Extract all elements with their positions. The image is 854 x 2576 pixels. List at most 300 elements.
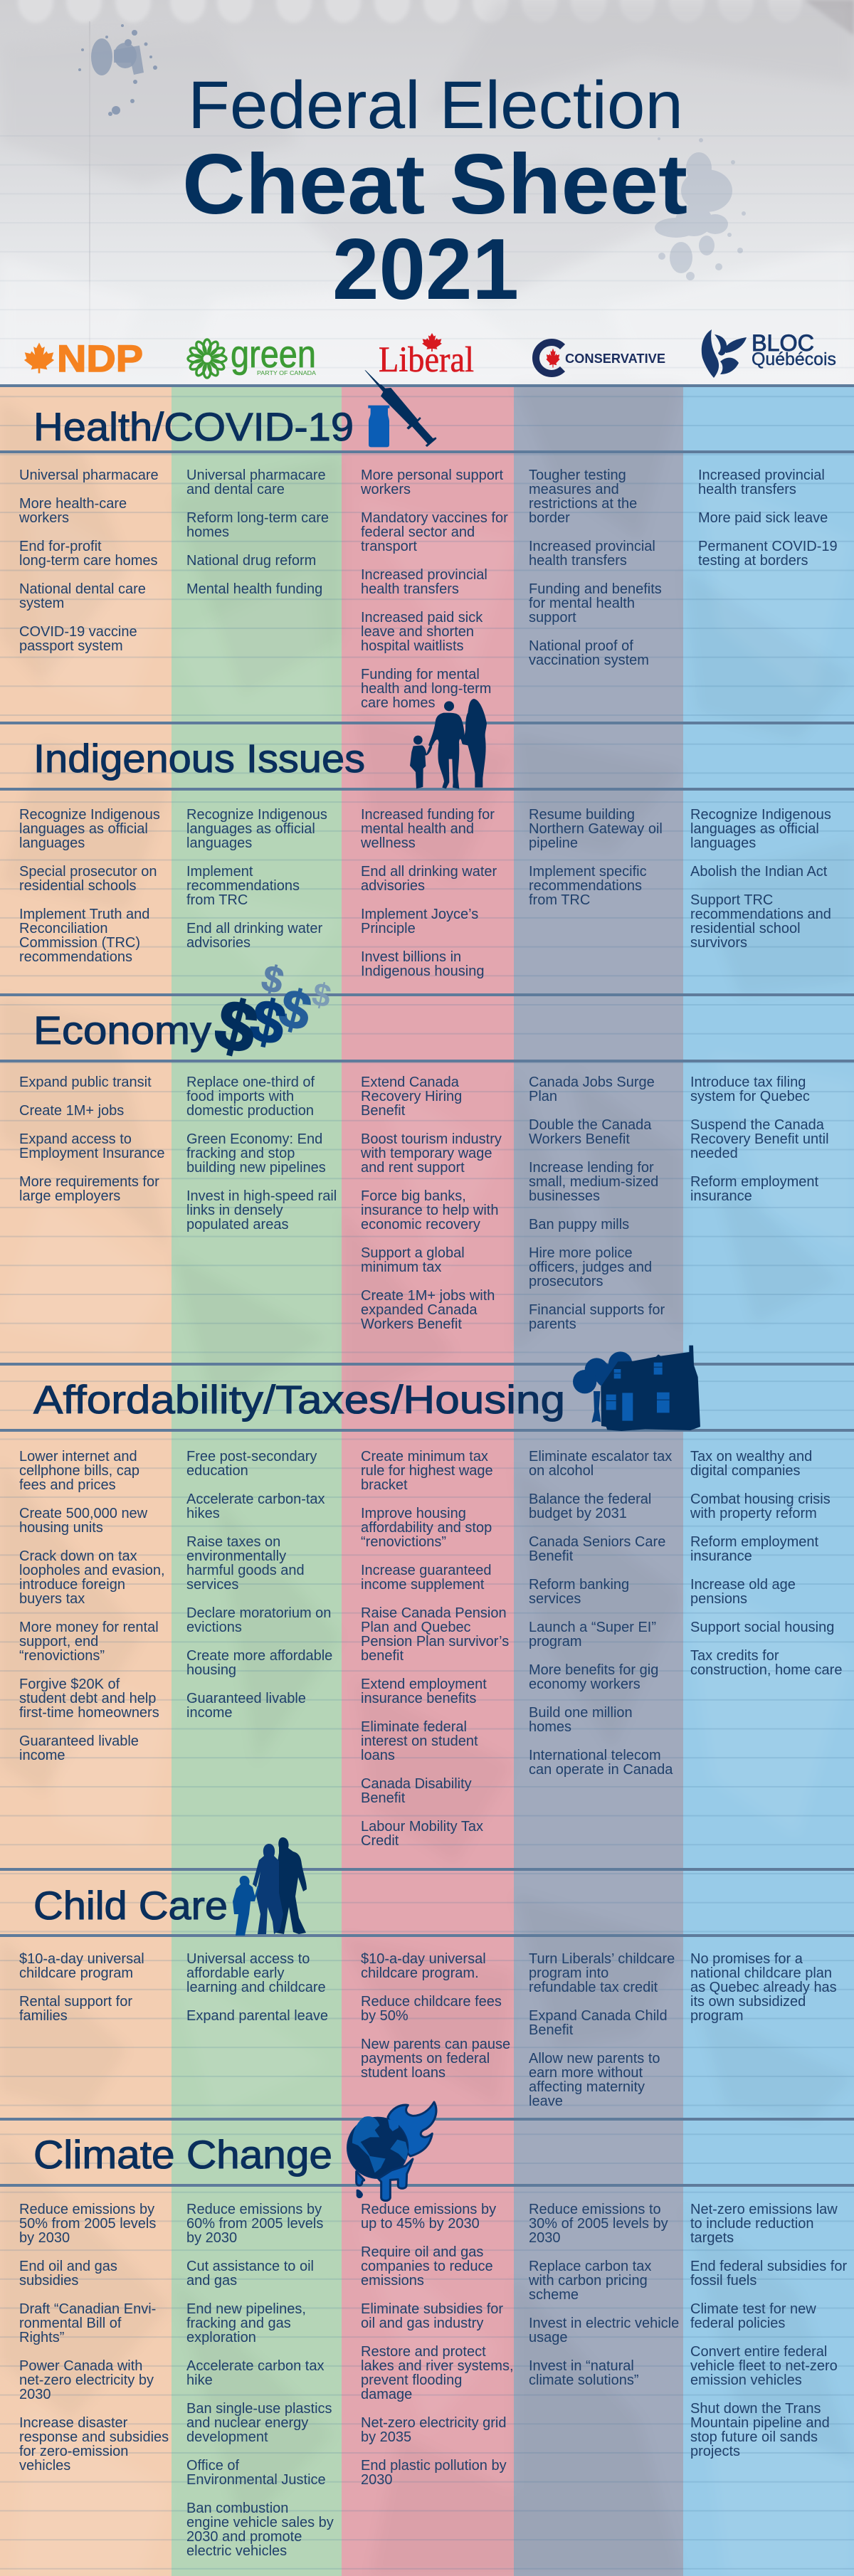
column: Liberal economy policies (361, 1075, 502, 1332)
column: Bloc Indigenous policies: Support TRC (690, 892, 773, 908)
column: Bloc health policies: More paid sick leave (698, 510, 828, 526)
column: NDP health policies: system (19, 596, 64, 611)
column: NDP health policies: long-term care homes (19, 553, 158, 569)
column: Conservative climate policies: with carbon pricing (529, 2273, 648, 2289)
column: NDP climate policies: Draft “Canadian Envi- (19, 2301, 156, 2317)
column: Bloc child care policies (690, 1952, 854, 2037)
column: NDP economy policies: large employers (19, 1188, 120, 1204)
column: Liberal affordability policies: Create minimum tax (361, 1449, 488, 1464)
column: NDP climate policies: Increase disaster (19, 2415, 127, 2431)
column: Liberal climate policies: prevent flooding (361, 2372, 462, 2388)
column: Liberal economy policies: expanded Canada (361, 1302, 477, 1318)
heading: Affordability/Taxes/Housing: Affordability/Taxes/Housing (33, 1377, 565, 1422)
column: Conservative climate policies: climate solutions” (529, 2372, 639, 2388)
logo: Conservative: CONSERVATIVE (565, 352, 665, 366)
column: Green economy policies: Green Economy: End (186, 1131, 322, 1147)
column: NDP affordability policies: fees and prices (19, 1477, 116, 1493)
icon: dollar signs: $ (258, 957, 288, 1003)
party logos row (24, 329, 836, 380)
column: Liberal climate policies: Eliminate subsidies for (361, 2301, 503, 2317)
column: Conservative child care policies (529, 1952, 697, 2123)
column: Liberal economy policies: Benefit (361, 1103, 405, 1119)
column: Liberal affordability policies: insurance benefits (361, 1691, 476, 1706)
column: Conservative economy policies: officers, judges and (529, 1260, 652, 1275)
column: NDP affordability policies: student debt and help (19, 1691, 156, 1706)
column: Bloc affordability policies: digital companies (690, 1463, 801, 1479)
column: Green climate policies: 60% from 2005 levels (186, 2216, 323, 2232)
column: NDP affordability policies: Guaranteed livable (19, 1733, 139, 1749)
column: Liberal economy policies: Create 1M+ jobs with (361, 1288, 495, 1304)
column: NDP Indigenous policies: recommendations (19, 949, 132, 965)
column: Bloc climate policies: fossil fuels (690, 2273, 757, 2289)
column: Conservative affordability policies: Canada Seniors Care (529, 1534, 665, 1550)
column: NDP child care policies: childcare program (19, 1965, 133, 1981)
column: Green health policies: Reform long-term care (186, 510, 329, 526)
column: NDP affordability policies: first-time homeowners (19, 1705, 159, 1721)
column: Liberal affordability policies: bracket (361, 1477, 408, 1493)
column: Green Indigenous policies: languages as official (186, 821, 315, 837)
column: NDP Indigenous policies: languages as official (19, 821, 148, 837)
column: Conservative affordability policies: program (529, 1634, 581, 1649)
column: Liberal health policies: workers (361, 482, 411, 497)
column: Bloc affordability policies (690, 1449, 842, 1678)
column: Liberal child care policies: Reduce childcare fees (361, 1994, 502, 2010)
column: Green affordability policies: environmentally (186, 1548, 286, 1564)
column: Conservative child care policies: leave (529, 2094, 563, 2109)
column: NDP climate policies: End oil and gas (19, 2259, 117, 2274)
column: Bloc economy policies: Recovery Benefit until (690, 1131, 829, 1147)
column: Green economy policies: domestic production (186, 1103, 314, 1119)
column: Conservative Indigenous policies: Implement specific (529, 864, 647, 880)
column: Conservative economy policies: Canada Jobs Surge (529, 1075, 655, 1090)
column: NDP economy policies: Expand access to (19, 1131, 132, 1147)
column: Green Indigenous policies: languages (186, 835, 252, 851)
column: Liberal child care policies: by 50% (361, 2008, 408, 2024)
column: Green health policies: Universal pharmacare (186, 468, 326, 483)
column: NDP child care policies: $10-a-day universal (19, 1951, 144, 1967)
column: Green affordability policies: income (186, 1705, 232, 1721)
column: NDP affordability policies (19, 1449, 165, 1763)
column: NDP affordability policies: “renovictions” (19, 1648, 105, 1664)
column: Liberal affordability policies: Pension Plan survivor’s (361, 1634, 509, 1649)
column: Green climate policies: and gas (186, 2273, 237, 2289)
column: Bloc Indigenous policies: survivors (690, 935, 747, 951)
column: NDP climate policies: by 2030 (19, 2230, 70, 2246)
column: Liberal affordability policies: Canada Disability (361, 1776, 472, 1792)
column: NDP health policies: Universal pharmacare (19, 468, 159, 483)
icon: dollar signs (199, 954, 356, 1067)
column: Green health policies: Mental health funding (186, 581, 322, 597)
column: NDP climate policies: vehicles (19, 2458, 70, 2474)
panel: Child Care (0, 1868, 854, 2109)
column: NDP affordability policies: support, end (19, 1634, 98, 1649)
column: NDP health policies: National dental care (19, 581, 146, 597)
column: Bloc climate policies: emission vehicles (690, 2372, 802, 2388)
column: Liberal health policies: federal sector and (361, 524, 475, 540)
column: Liberal health policies (361, 468, 508, 711)
logo: Green Party of Canada (188, 333, 316, 378)
column: NDP economy policies: Employment Insurance (19, 1146, 165, 1161)
column: Green climate policies: Accelerate carbon tax (186, 2358, 324, 2374)
column: Bloc climate policies: Convert entire federal (690, 2344, 827, 2360)
title line: Cheat Sheet: Cheat Sheet (182, 137, 687, 232)
column: Green Indigenous policies: from TRC (186, 892, 248, 908)
column: Liberal economy policies: insurance to help with (361, 1203, 498, 1218)
column: Bloc Indigenous policies: Abolish the Indian Act (690, 864, 827, 880)
column: Liberal health policies: hospital waitlists (361, 638, 464, 654)
heading: Climate Change: Climate Change (33, 2132, 332, 2177)
logo: NDP (24, 338, 143, 380)
column: Conservative climate policies: Reduce emissions to (529, 2202, 661, 2217)
column: Liberal health policies: Increased paid sick (361, 610, 483, 625)
column: Bloc child care policies: national childcare plan (690, 1965, 832, 1981)
column: NDP Indigenous policies: residential schools (19, 878, 137, 894)
column: Green affordability policies: hikes (186, 1506, 220, 1521)
column: Green economy policies (186, 1075, 337, 1232)
column: Conservative economy policies: Ban puppy mills (529, 1217, 629, 1232)
column: Conservative climate policies: 2030 (529, 2230, 561, 2246)
column: Liberal economy policies: Boost tourism industry (361, 1131, 502, 1147)
column: Green economy policies: Invest in high-speed rail (186, 1188, 337, 1204)
logo: Bloc Québécois: Québécois (752, 349, 836, 369)
column: Bloc Indigenous policies: residential school (690, 921, 801, 936)
column: NDP economy policies: Create 1M+ jobs (19, 1103, 124, 1119)
column: Conservative affordability policies: can operate in Canada (529, 1762, 673, 1778)
column: Conservative climate policies: usage (529, 2330, 568, 2345)
icon: house and tree (562, 1338, 712, 1437)
column: NDP affordability policies: income (19, 1748, 65, 1763)
column: Liberal child care policies: student loans (361, 2065, 446, 2081)
column: Liberal climate policies: by 2035 (361, 2429, 411, 2445)
column: Conservative affordability policies: services (529, 1591, 581, 1607)
column: NDP health policies: workers (19, 510, 69, 526)
column: Green affordability policies: education (186, 1463, 248, 1479)
column: Green affordability policies: Guaranteed livable (186, 1691, 306, 1706)
column: Green child care policies: Expand parental leave (186, 2008, 328, 2024)
column: NDP climate policies: 2030 (19, 2387, 51, 2402)
column: Liberal health policies: health and long-term (361, 681, 491, 697)
column: Green child care policies (186, 1952, 354, 2037)
column: Green economy policies: links in densely (186, 1203, 283, 1218)
column: Conservative Indigenous policies: Northern Gateway oil (529, 821, 663, 837)
column: Bloc affordability policies: Tax credits for (690, 1648, 779, 1664)
column: Liberal affordability policies: rule for highest wage (361, 1463, 493, 1479)
column: Green affordability policies: Declare moratorium on (186, 1605, 331, 1621)
column: Bloc economy policies (690, 1075, 829, 1204)
column: Conservative affordability policies: Reform banking (529, 1577, 629, 1593)
logo: Conservative (536, 342, 665, 374)
column: Bloc Indigenous policies: languages (690, 835, 756, 851)
column: Bloc economy policies: insurance (690, 1188, 752, 1204)
column: Green affordability policies: services (186, 1577, 238, 1593)
column: Liberal affordability policies: benefit (361, 1648, 404, 1664)
column: Liberal Indigenous policies: Indigenous housing (361, 964, 484, 979)
column: Green climate policies: and nuclear energy (186, 2415, 308, 2431)
column: Bloc climate policies: federal policies (690, 2316, 785, 2331)
icon: dollar signs: $ (208, 983, 265, 1067)
column: NDP Indigenous policies (19, 807, 160, 965)
column: Green climate policies: 2030 and promote (186, 2529, 302, 2545)
column: Liberal economy policies: Extend Canada (361, 1075, 459, 1090)
column: Conservative economy policies: parents (529, 1316, 576, 1332)
column: Liberal child care policies: New parents can pause (361, 2037, 510, 2052)
column: NDP Indigenous policies: languages (19, 835, 85, 851)
column: Conservative Indigenous policies: from TRC (529, 892, 590, 908)
column: Bloc climate policies: Mountain pipeline and (690, 2415, 830, 2431)
column: Conservative child care policies: affecting maternity (529, 2079, 645, 2095)
column: Liberal child care policies: childcare program. (361, 1965, 479, 1981)
column: Bloc affordability policies: Support social housing (690, 1620, 834, 1635)
column: Liberal economy policies: economic recovery (361, 1217, 480, 1232)
column: Liberal climate policies: oil and gas industry (361, 2316, 483, 2331)
column: Conservative affordability policies: economy workers (529, 1677, 640, 1692)
column: Liberal economy policies: Force big banks, (361, 1188, 466, 1204)
column: Liberal Indigenous policies: End all drinking water (361, 864, 497, 880)
column: Liberal climate policies: 2030 (361, 2472, 393, 2488)
column: NDP climate policies: Reduce emissions by (19, 2202, 154, 2217)
column: Conservative affordability policies (529, 1449, 673, 1778)
column: Liberal climate policies: Net-zero electricity grid (361, 2415, 507, 2431)
column: Conservative Indigenous policies (529, 807, 663, 908)
column: Conservative affordability policies: homes (529, 1719, 571, 1735)
column: Bloc affordability policies: construction, home care (690, 1662, 842, 1678)
column: Bloc affordability policies: Combat housing crisis (690, 1492, 831, 1507)
icon: melting globe with flame (334, 2092, 455, 2213)
column: NDP affordability policies: Create 500,000 new (19, 1506, 147, 1521)
column: NDP climate policies (19, 2202, 187, 2487)
column: Conservative health policies: Tougher testing (529, 468, 626, 483)
icon: syringe and vaccine vial (306, 363, 470, 455)
column: Liberal climate policies: damage (361, 2387, 412, 2402)
column: Green climate policies (186, 2202, 354, 2572)
column: Liberal climate policies: Reduce emissions by (361, 2202, 496, 2217)
column: Bloc climate policies: to include reduction (690, 2216, 813, 2232)
column: Bloc economy policies: Suspend the Canada (690, 1117, 824, 1133)
panel: Health/COVID-19 (0, 384, 854, 711)
column: NDP health policies: passport system (19, 638, 123, 654)
column: Green child care policies: affordable early (186, 1965, 285, 1981)
column: NDP affordability policies: Crack down on tax (19, 1548, 137, 1564)
column: Green Indigenous policies: Implement (186, 864, 253, 880)
column: Conservative health policies: border (529, 510, 570, 526)
column: Liberal health policies: care homes (361, 695, 436, 711)
column: Bloc child care policies: No promises for a (690, 1951, 803, 1967)
column: Bloc affordability policies: pensions (690, 1591, 747, 1607)
column: Conservative climate policies: Invest in electric vehicle (529, 2316, 679, 2331)
column: NDP affordability policies: housing units (19, 1520, 103, 1536)
column: Conservative child care policies: program into (529, 1965, 608, 1981)
column: Liberal child care policies: $10-a-day universal (361, 1951, 486, 1967)
column: Green health policies (186, 468, 329, 597)
column: Liberal health policies: leave and shorten (361, 624, 474, 640)
column: Conservative health policies: restrictions at the (529, 496, 637, 512)
column: NDP economy policies: More requirements for (19, 1174, 159, 1190)
column: Conservative climate policies: scheme (529, 2287, 579, 2303)
column: NDP climate policies: 50% from 2005 levels (19, 2216, 156, 2232)
column: Conservative economy policies: prosecutors (529, 1274, 603, 1289)
column: Bloc climate policies: Net-zero emissions law (690, 2202, 838, 2217)
column: Bloc climate policies: Shut down the Trans (690, 2401, 821, 2417)
column: Green affordability policies: Raise taxes on (186, 1534, 280, 1550)
column: Bloc Indigenous policies: recommendations and (690, 907, 831, 922)
column: Green climate policies: Reduce emissions by (186, 2202, 322, 2217)
column: NDP child care policies (19, 1952, 187, 2037)
column: Green climate policies: Environmental Justice (186, 2472, 326, 2488)
column: Bloc economy policies: system for Quebec (690, 1089, 810, 1104)
column: Conservative Indigenous policies: Resume building (529, 807, 635, 823)
column: Liberal affordability policies: loans (361, 1748, 395, 1763)
column: Liberal affordability policies (361, 1449, 509, 1849)
column: Green health policies: and dental care (186, 482, 285, 497)
column: Conservative child care policies: Allow new parents to (529, 2051, 660, 2066)
column: Green economy policies: Replace one-third of (186, 1075, 315, 1090)
column: Bloc climate policies: stop future oil sands (690, 2429, 818, 2445)
column: Liberal Indigenous policies: mental health and (361, 821, 474, 837)
column: Bloc economy policies: Introduce tax filing (690, 1075, 806, 1090)
column: Liberal climate policies: Require oil and gas (361, 2244, 483, 2260)
column: Conservative child care policies: earn more without (529, 2065, 643, 2081)
column: Green child care policies: learning and childcare (186, 1980, 326, 1995)
column: Green affordability policies: Free post-secondary (186, 1449, 317, 1464)
column: Bloc child care policies: its own subsidized (690, 1994, 806, 2010)
column: Conservative health policies: for mental health (529, 596, 635, 611)
column: Liberal affordability policies: “renovictions” (361, 1534, 446, 1550)
heading: Economy: Economy (33, 1008, 211, 1052)
figure: child (233, 1876, 259, 1936)
column: Conservative climate policies: 30% of 2005 levels by (529, 2216, 668, 2232)
column: Green economy policies: building new pipelines (186, 1160, 326, 1176)
column: Conservative affordability policies: Build one million (529, 1705, 633, 1721)
column: Liberal affordability policies: affordability and stop (361, 1520, 492, 1536)
column: Conservative health policies: Funding and benefits (529, 581, 662, 597)
column: NDP affordability policies: buyers tax (19, 1591, 85, 1607)
heading: Child Care: Child Care (33, 1883, 228, 1928)
column: NDP affordability policies: More money for rental (19, 1620, 159, 1635)
column: Green climate policies: Cut assistance to oil (186, 2259, 314, 2274)
column: Liberal affordability policies: Plan and Quebec (361, 1620, 471, 1635)
column: Conservative health policies: health transfers (529, 553, 627, 569)
column: NDP health policies: COVID-19 vaccine (19, 624, 137, 640)
column: Bloc climate policies: End federal subsidies for (690, 2259, 847, 2274)
column: Green climate policies: engine vehicle sales by (186, 2515, 334, 2530)
column: Bloc affordability policies: Increase old age (690, 1577, 796, 1593)
logo: Liberal: Liberal (379, 340, 474, 380)
column: NDP child care policies: families (19, 2008, 68, 2024)
column: NDP affordability policies: introduce foreign (19, 1577, 125, 1593)
column: Bloc Indigenous policies: languages as official (690, 821, 819, 837)
column: Conservative affordability policies: More benefits for gig (529, 1662, 658, 1678)
title line: Federal Election: Federal Election (188, 68, 683, 143)
column: Liberal affordability policies: interest on student (361, 1733, 478, 1749)
panel: Economy (0, 993, 854, 1332)
column: Liberal child care policies (361, 1952, 529, 2094)
column: Green climate policies: hike (186, 2372, 213, 2388)
column: Conservative economy policies: Workers Benefit (529, 1131, 630, 1147)
column: Liberal health policies: health transfers (361, 581, 459, 597)
column: Liberal affordability policies: Eliminate federal (361, 1719, 467, 1735)
column: Liberal economy policies: Support a global (361, 1245, 465, 1261)
column: Liberal climate policies: companies to reduce (361, 2259, 493, 2274)
column: NDP economy policies: Expand public transit (19, 1075, 152, 1090)
column: Liberal affordability policies: Labour Mobility Tax (361, 1819, 483, 1835)
column: Conservative affordability policies: Balance the federal (529, 1492, 651, 1507)
column: Conservative affordability policies: on alcohol (529, 1463, 594, 1479)
column: Green Indigenous policies: advisories (186, 935, 251, 951)
column: Liberal economy policies: and rent support (361, 1160, 465, 1176)
column: Conservative economy policies: Hire more police (529, 1245, 633, 1261)
column: Conservative health policies: support (529, 610, 576, 625)
column: Green climate policies: by 2030 (186, 2230, 237, 2246)
column: Bloc Indigenous policies (690, 807, 831, 951)
column: NDP affordability policies: cellphone bills, cap (19, 1463, 139, 1479)
column: NDP Indigenous policies: Commission (TRC) (19, 935, 140, 951)
icon: dollar signs: $ (245, 986, 291, 1058)
column: Green affordability policies: Create more affordable (186, 1648, 332, 1664)
column: Bloc health policies: health transfers (698, 482, 796, 497)
column: NDP economy policies (19, 1075, 165, 1204)
column: Conservative affordability policies: Benefit (529, 1548, 573, 1564)
panel: Climate Change (0, 2118, 854, 2576)
column: Liberal Indigenous policies: Invest billions in (361, 949, 461, 965)
column: NDP affordability policies: loopholes and evasion, (19, 1563, 165, 1578)
column: Green climate policies: fracking and gas (186, 2316, 291, 2331)
column: Bloc health policies: testing at borders (698, 553, 808, 569)
column: Liberal affordability policies: Improve housing (361, 1506, 466, 1521)
column: Bloc climate policies: vehicle fleet to net-zero (690, 2358, 838, 2374)
column: Green health policies: National drug reform (186, 553, 316, 569)
column: Conservative child care policies: Expand Canada Child (529, 2008, 668, 2024)
column: Conservative child care policies: Turn Liberals’ childcare (529, 1951, 675, 1967)
column: Liberal affordability policies: Raise Canada Pension (361, 1605, 507, 1621)
icon: dollar signs: $ (273, 977, 317, 1043)
column: Liberal economy policies: Workers Benefit (361, 1316, 462, 1332)
column: Liberal economy policies: with temporary wage (361, 1146, 492, 1161)
column: Bloc economy policies: needed (690, 1146, 738, 1161)
column: Conservative climate policies (529, 2202, 697, 2402)
column: Conservative affordability policies: budget by 2031 (529, 1506, 627, 1521)
column: NDP affordability policies: Forgive $20K of (19, 1677, 120, 1692)
column: Liberal health policies: transport (361, 539, 417, 554)
column: Bloc Indigenous policies: Recognize Indigenous (690, 807, 831, 823)
column: Conservative climate policies: Invest in “natural (529, 2358, 634, 2374)
column: Green climate policies: Ban single-use plastics (186, 2401, 332, 2417)
column: Conservative economy policies (529, 1075, 665, 1332)
column: Bloc climate policies: Climate test for new (690, 2301, 816, 2317)
column: Liberal climate policies: lakes and river systems, (361, 2358, 514, 2374)
icon: couple with child silhouette (228, 1832, 313, 1939)
panel: Affordability/Taxes/Housing (0, 1363, 854, 1849)
logo: Green Party of Canada: green (231, 333, 316, 376)
column: Green climate policies: Ban combustion (186, 2501, 288, 2516)
panel: Indigenous Issues (0, 722, 854, 979)
column: Liberal affordability policies: income supplement (361, 1577, 484, 1593)
column: Conservative economy policies: Double the Canada (529, 1117, 651, 1133)
column: NDP climate policies: for zero-emission (19, 2444, 128, 2459)
column: Liberal affordability policies: Extend employment (361, 1677, 487, 1692)
logo: NDP: NDP (57, 338, 143, 380)
column: Conservative economy policies: businesses (529, 1188, 600, 1204)
column: Liberal climate policies: emissions (361, 2273, 424, 2289)
logo: Bloc Québécois: BLOC (752, 330, 814, 356)
column: Bloc economy policies: Reform employment (690, 1174, 818, 1190)
column: Green affordability policies: evictions (186, 1620, 242, 1635)
logo: Green Party of Canada: PARTY OF CANADA (257, 369, 316, 376)
column: Conservative health policies: measures and (529, 482, 619, 497)
column: Conservative child care policies: refundable tax credit (529, 1980, 658, 1995)
column: Bloc affordability policies: with property reform (690, 1506, 817, 1521)
column: Green Indigenous policies: Recognize Indigenous (186, 807, 327, 823)
title (182, 68, 687, 313)
